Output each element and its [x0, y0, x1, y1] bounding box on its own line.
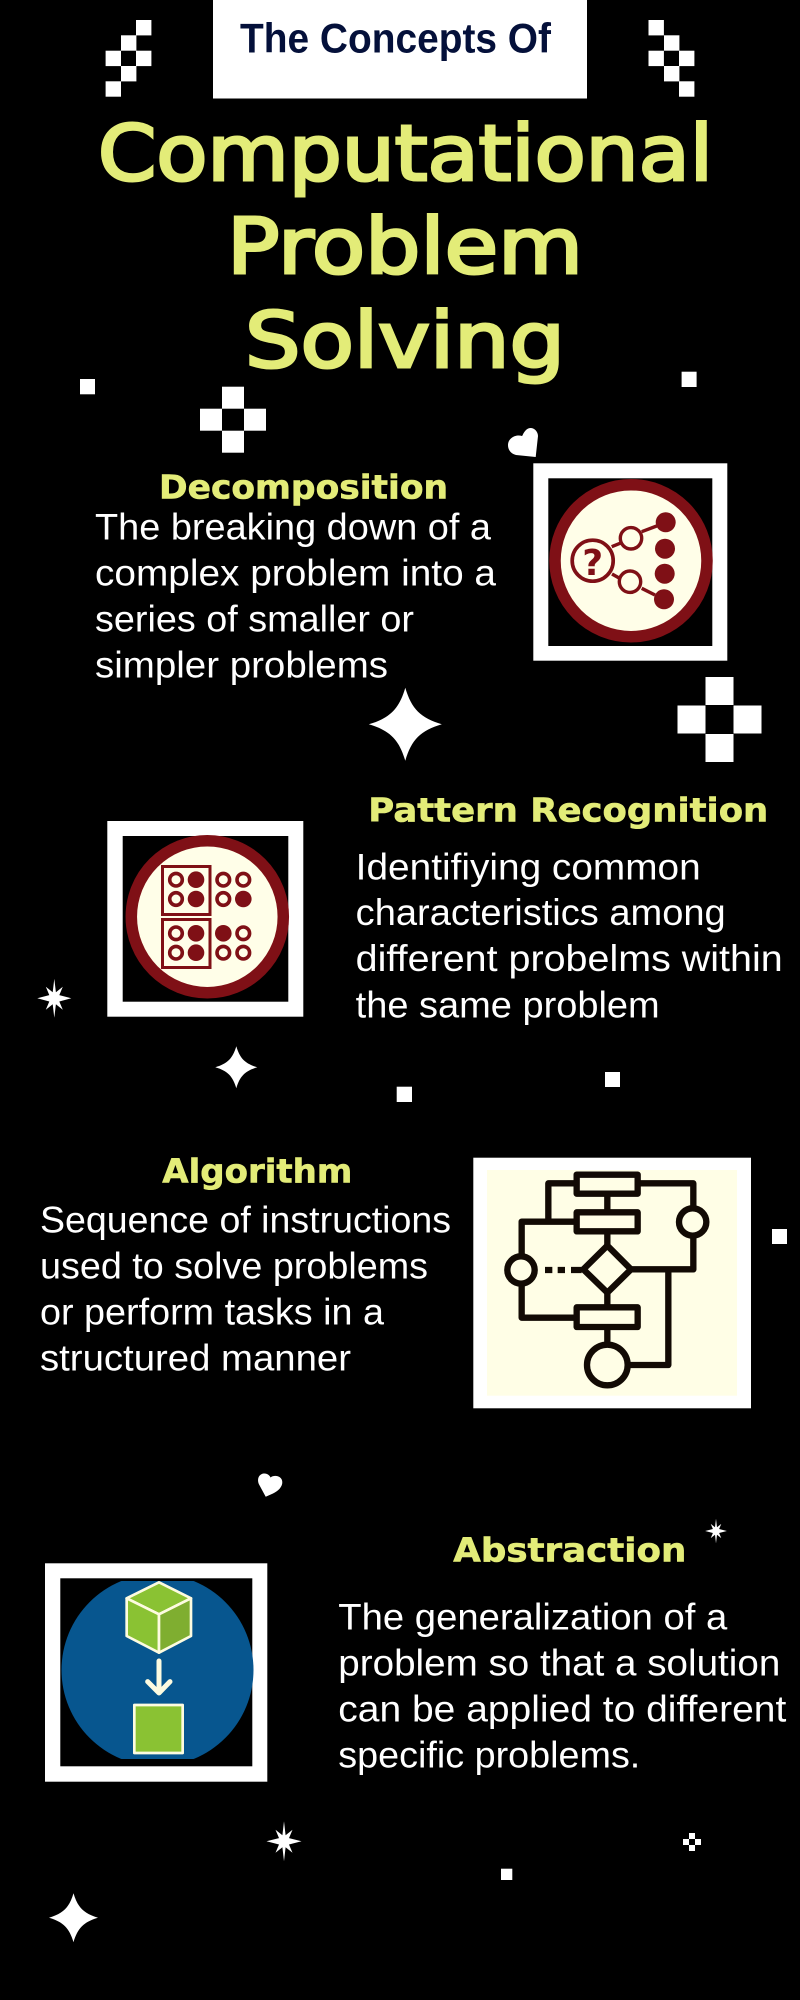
- text: pattern recognition description: characteristics among: [356, 892, 726, 933]
- section: abstraction text: [338, 1531, 787, 1775]
- heading: algorithm: Algorithm: [162, 1152, 352, 1191]
- star decoration: [215, 1046, 257, 1088]
- text: algorithm description: Sequence of instructions: [40, 1199, 451, 1240]
- text: algorithm description: [40, 1199, 451, 1379]
- text: abstraction description: can be applied to different: [338, 1689, 787, 1730]
- subtitle banner: The Concepts Of: [240, 14, 552, 61]
- text: algorithm description: or perform tasks in a: [40, 1291, 384, 1332]
- square decoration: [682, 372, 697, 387]
- square decoration: [397, 1087, 412, 1102]
- text: pattern recognition description: Identifiying common: [356, 846, 701, 887]
- text: pattern recognition description: different probelms within: [356, 938, 783, 979]
- text: decomposition description: simpler problems: [95, 645, 388, 686]
- star decoration: [705, 1519, 727, 1543]
- text: abstraction description: specific problems.: [338, 1734, 640, 1775]
- subtitle banner: [213, 0, 587, 98]
- section: algorithm text: [40, 1152, 451, 1379]
- star decoration: [266, 1821, 302, 1861]
- section: decomposition text: [95, 467, 496, 686]
- heading: decomposition: Decomposition: [159, 467, 448, 506]
- section: pattern recognition text: [356, 791, 783, 1025]
- square decoration: [80, 379, 95, 394]
- heading: abstraction: Abstraction: [453, 1531, 686, 1570]
- text: pattern recognition description: [356, 846, 783, 1025]
- text: decomposition description: complex problem into a: [95, 553, 496, 594]
- icon: flowchart: [473, 1158, 751, 1408]
- text: decomposition description: series of smaller or: [95, 599, 414, 640]
- icon: decomposition tree: ?: [582, 543, 603, 584]
- square decoration: [772, 1229, 787, 1244]
- text: abstraction description: [338, 1596, 787, 1775]
- text: algorithm description: used to solve problems: [40, 1245, 428, 1286]
- title: [98, 110, 713, 386]
- square decoration: [501, 1869, 512, 1880]
- text: decomposition description: The breaking down of a: [95, 506, 491, 547]
- text: pattern recognition description: the same problem: [356, 984, 660, 1025]
- text: abstraction description: problem so that a solution: [338, 1643, 780, 1684]
- text: decomposition description: [95, 506, 496, 686]
- checker decoration: [678, 677, 762, 762]
- checker decoration: [200, 387, 266, 453]
- checker decoration: [683, 1833, 701, 1851]
- text: abstraction description: The generalization of a: [338, 1596, 728, 1637]
- title: Computational: [98, 110, 713, 199]
- pixel decoration top right: [648, 20, 694, 97]
- star decoration: [369, 688, 442, 761]
- icon: abstraction cube to square: [45, 1563, 267, 1782]
- heart decoration: [258, 1473, 282, 1497]
- pixel decoration top left: [106, 20, 151, 97]
- square decoration: [605, 1072, 620, 1087]
- heart decoration: [508, 428, 538, 457]
- star decoration: [37, 979, 71, 1018]
- text: algorithm description: structured manner: [40, 1338, 351, 1379]
- icon: decomposition tree: [533, 463, 727, 661]
- title: Solving: [245, 297, 565, 386]
- icon: pattern dots: [107, 821, 303, 1017]
- title: Problem: [227, 203, 583, 292]
- heading: pattern recognition: Pattern Recognition: [368, 791, 768, 830]
- star decoration: [49, 1893, 98, 1942]
